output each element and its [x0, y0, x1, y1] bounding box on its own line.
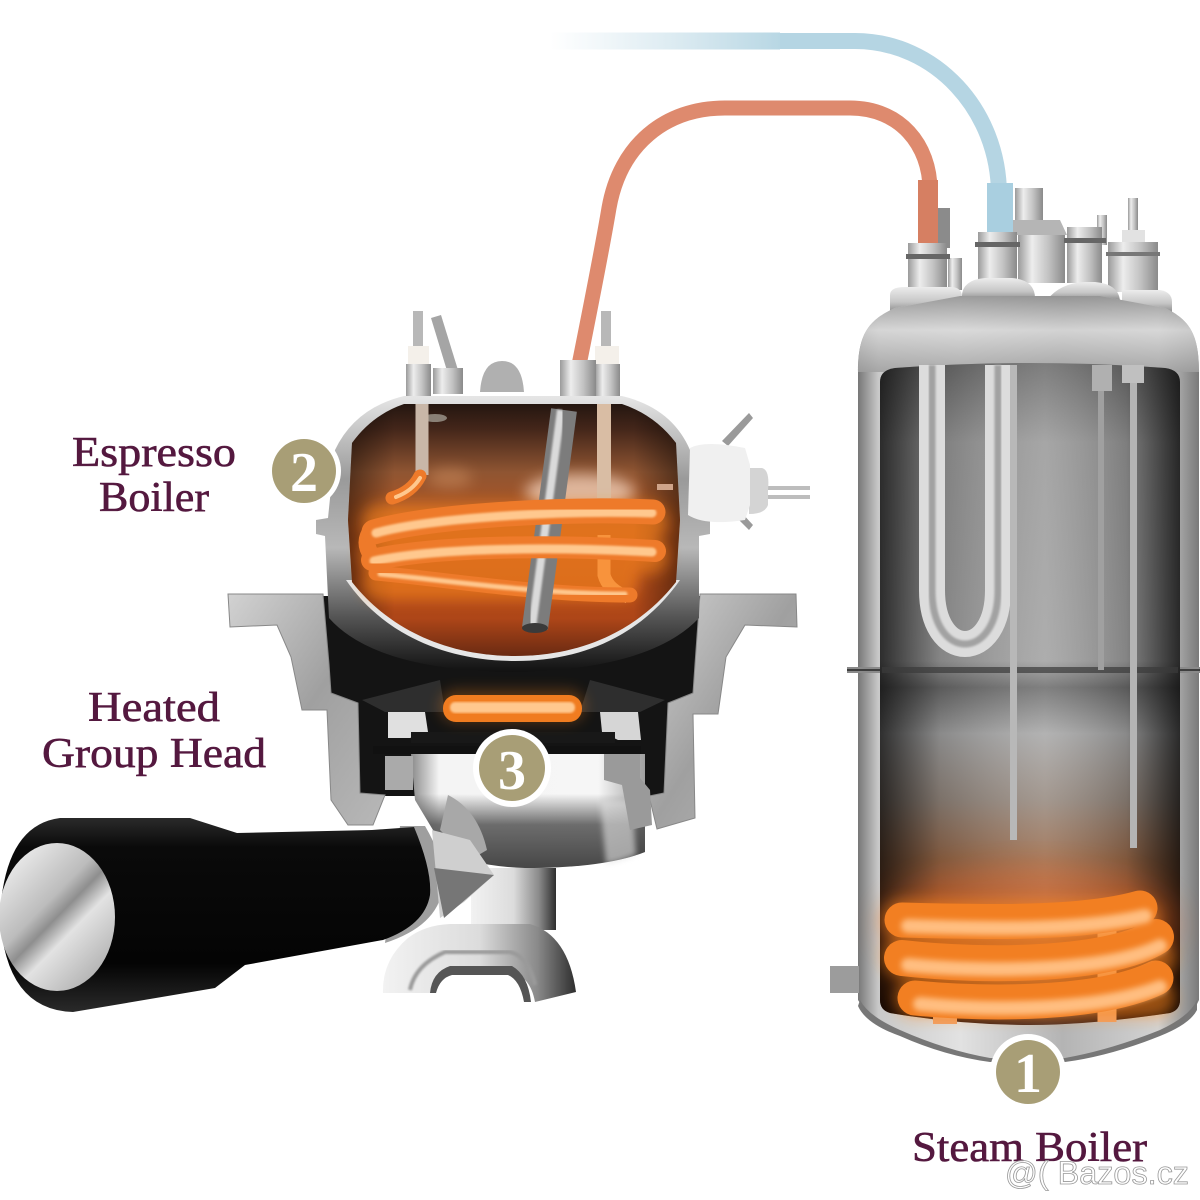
espresso boiler cutaway [348, 404, 680, 656]
group head [228, 594, 797, 829]
steam boiler outlet [830, 966, 859, 993]
espresso boiler [316, 311, 810, 672]
label: heated group head [42, 685, 266, 777]
badge 2 [267, 434, 341, 508]
label: heated group head: Heated [88, 685, 220, 731]
group head windows [388, 712, 428, 738]
group head heating element [440, 690, 585, 722]
cold water pipe [550, 41, 999, 240]
steam boiler fittings [890, 180, 1172, 312]
hot water pipe [579, 108, 930, 365]
badge 1 [990, 1034, 1066, 1110]
label: espresso boiler: Boiler [99, 475, 209, 521]
steam boiler [830, 180, 1200, 1062]
portafilter collar [385, 795, 494, 943]
portafilter spout [383, 868, 576, 1002]
portafilter end cap [0, 843, 115, 991]
probes [1010, 365, 1017, 840]
watermark: @( Bazos.cz [1005, 1155, 1189, 1191]
group head right flange [649, 594, 797, 829]
label: heated group head: Group Head [42, 731, 266, 777]
steam coil [902, 908, 1160, 1024]
badge 1: 1 [1014, 1043, 1042, 1105]
badge 3 [473, 729, 551, 807]
side fitting [657, 413, 810, 530]
espresso boiler diagonal tube [522, 410, 564, 633]
group head left flange [228, 594, 385, 825]
portafilter [0, 754, 652, 1012]
espresso coil lower [376, 522, 650, 595]
group head dark casting [323, 596, 700, 796]
espresso boiler shell [316, 396, 710, 672]
steam boiler cutaway [880, 363, 1180, 1025]
espresso boiler fittings [406, 311, 620, 398]
espresso boiler bowl rim [346, 580, 680, 661]
badge 3: 3 [498, 740, 526, 802]
heating element U tube [932, 365, 998, 644]
group head seal [411, 732, 615, 743]
steam boiler shell [858, 296, 1199, 1060]
label: steam boiler: Steam Boiler [912, 1125, 1147, 1171]
label: espresso boiler [72, 430, 236, 521]
badge 2: 2 [290, 442, 318, 504]
portafilter basket [385, 754, 652, 868]
espresso coil upper [367, 476, 655, 561]
portafilter handle [0, 818, 430, 1012]
espresso boiler inner tubes [422, 404, 628, 597]
label: espresso boiler: Espresso [72, 430, 236, 476]
